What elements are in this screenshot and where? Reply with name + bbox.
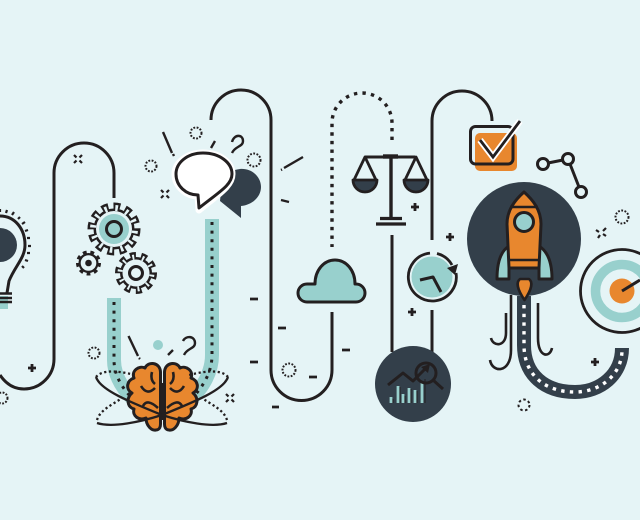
rocket body — [507, 192, 541, 268]
teal dotted U-shaped channel — [114, 219, 212, 403]
icon: target — [580, 250, 640, 332]
exhaust hooks — [490, 295, 552, 369]
flame — [518, 279, 531, 300]
brain hemispheres — [128, 363, 197, 430]
fins — [497, 246, 509, 279]
decorative plus signs — [28, 203, 599, 372]
icon: balance scale — [353, 156, 428, 224]
icon: checkbox — [470, 121, 520, 171]
icon: cloud — [298, 260, 365, 302]
icon: rocket in circle — [467, 182, 581, 300]
icon: brain with orbits — [96, 363, 228, 430]
decorative dotted rings — [0, 128, 628, 410]
icon: clock — [408, 253, 458, 301]
decorative dashes — [250, 299, 350, 407]
icon: connected nodes — [538, 154, 586, 198]
white bubble — [175, 153, 232, 210]
orbit lines — [96, 371, 228, 425]
magnifier — [416, 363, 443, 389]
dark bubble — [220, 169, 261, 218]
bars — [391, 383, 422, 403]
medium gear — [118, 255, 154, 291]
right pan — [404, 157, 428, 192]
thought marks above brain — [128, 336, 195, 359]
speech bubbles — [175, 153, 261, 218]
brain folds — [141, 372, 184, 420]
icon: chart with magnifier — [375, 346, 451, 422]
small gear — [78, 252, 99, 274]
winding connector path — [0, 90, 492, 400]
decorative sparkles — [74, 155, 606, 402]
large gear — [91, 206, 137, 252]
icon: gears — [78, 206, 154, 291]
road trail behind rocket — [524, 296, 622, 392]
left pan — [353, 157, 377, 192]
icon: light bulb — [0, 209, 31, 309]
marks around speech bubbles — [163, 132, 303, 202]
window — [514, 212, 534, 232]
